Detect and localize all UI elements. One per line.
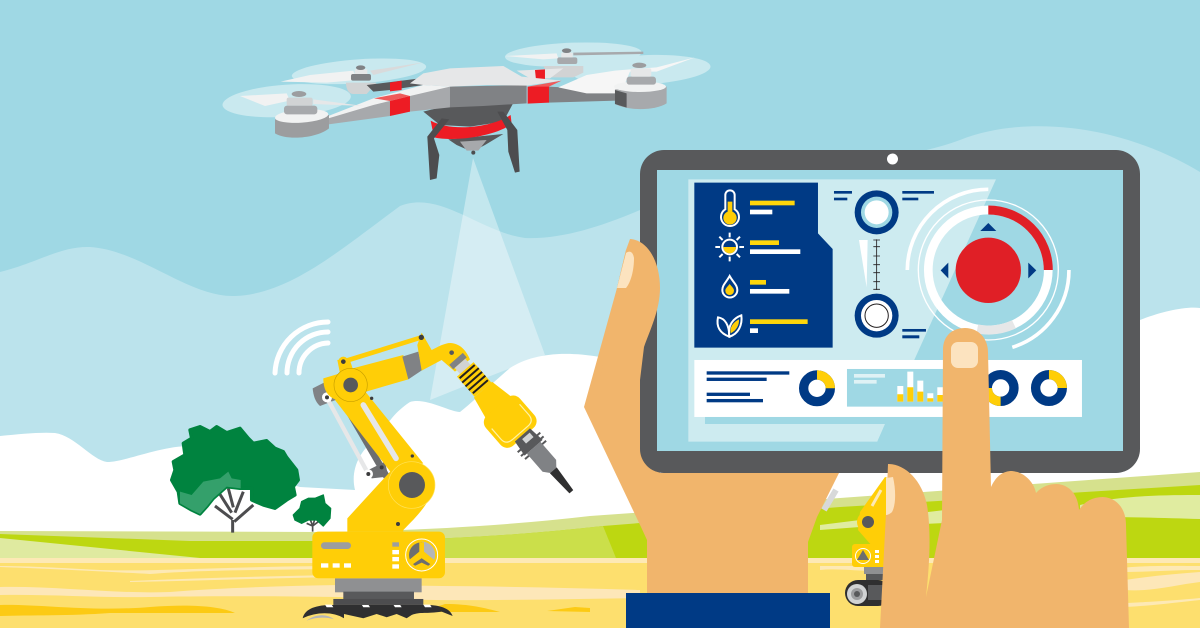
robot tracks — [303, 605, 453, 621]
upper arm stripe — [363, 405, 396, 458]
dial grey arc — [977, 324, 1014, 330]
drone legs — [427, 112, 520, 180]
panel shadow — [705, 415, 940, 424]
counterweight — [313, 383, 340, 406]
control wheel — [406, 539, 438, 571]
tablet frame — [640, 150, 1140, 473]
second small robot behind hand — [824, 477, 891, 606]
icon: sun — [715, 233, 744, 261]
rod joints — [322, 392, 373, 479]
camera housing — [448, 134, 503, 155]
tablet — [640, 150, 1140, 473]
connector — [513, 427, 543, 456]
wrist bands — [449, 353, 467, 369]
body panel grey bar — [321, 542, 351, 549]
drone light beam — [430, 158, 545, 400]
dial red arc — [988, 210, 1048, 270]
tablet camera — [887, 154, 898, 164]
donut chart 3 — [1036, 375, 1062, 401]
center body side — [450, 85, 527, 107]
elbow — [417, 333, 470, 372]
icon: thermometer — [721, 190, 739, 226]
small robot joint — [857, 511, 879, 533]
robot body box — [312, 532, 445, 578]
top rod — [343, 337, 422, 362]
red band right — [528, 81, 562, 104]
gauge labels — [834, 191, 934, 338]
small robot arm stripe — [872, 490, 881, 506]
right hand — [880, 328, 1129, 628]
panel: bottom stats — [694, 360, 1082, 417]
robot forearm — [323, 355, 408, 400]
front left arm — [328, 85, 450, 124]
gauge wedge — [859, 240, 868, 287]
forearm joint — [334, 357, 414, 526]
stats text lines — [707, 371, 789, 402]
robot base columns — [333, 578, 423, 605]
front left motor — [240, 91, 363, 138]
white clouds — [0, 308, 1200, 560]
icon: large tree — [172, 427, 298, 533]
tablet screen — [657, 170, 1123, 451]
right thumb nail — [886, 477, 895, 515]
gauge scale — [873, 239, 880, 290]
tree light shade — [180, 472, 241, 514]
dial white ring — [928, 210, 1048, 330]
body panel grey light — [392, 542, 399, 547]
dial arrows — [941, 223, 1036, 278]
tree crown — [172, 427, 298, 514]
tool head — [480, 392, 540, 452]
reading bars temperature — [750, 201, 795, 214]
reading bars water — [750, 280, 789, 294]
yellow crop ground — [0, 558, 1200, 628]
small robot tracks — [845, 567, 891, 606]
reading bars sun — [750, 240, 800, 254]
shoulder joint — [388, 462, 435, 508]
left hand thumb — [600, 239, 660, 380]
bar chart panel — [847, 369, 947, 407]
small tree trunk — [307, 519, 318, 532]
back right motor — [505, 48, 643, 77]
control dial — [907, 189, 1069, 347]
gauge top — [855, 190, 899, 234]
small robot arm — [858, 477, 888, 546]
lower link bracket — [368, 462, 388, 478]
yellow robot arm — [303, 333, 588, 621]
grey cylinder — [402, 352, 422, 379]
dial outer thin ring — [918, 200, 1058, 340]
icon: wifi signal — [275, 322, 328, 373]
upper arm — [335, 385, 423, 473]
index finger nail — [951, 342, 978, 368]
drone underside dome — [423, 102, 514, 127]
red band left — [374, 93, 410, 116]
shirt cuff — [626, 593, 830, 628]
stats panel background — [694, 360, 1082, 417]
dial outer arcs — [907, 189, 988, 270]
dial red button — [956, 238, 1021, 303]
front right motor — [558, 57, 695, 109]
thumb nail — [617, 252, 634, 288]
drone — [221, 40, 711, 180]
red ring — [431, 115, 512, 139]
white link rod — [327, 397, 368, 474]
icon: leaves — [717, 315, 742, 337]
rotor discs — [221, 40, 711, 121]
right arm — [548, 87, 617, 103]
left hand palm — [584, 250, 839, 593]
gauge bottom — [855, 294, 899, 338]
robot tool — [439, 344, 588, 507]
back left motor — [281, 62, 423, 94]
grey link rod — [345, 405, 387, 477]
small robot base — [852, 544, 888, 567]
accordion — [457, 362, 491, 397]
body panel white lights — [321, 550, 399, 569]
donut chart 2 — [987, 375, 1014, 401]
donut chart 1 — [804, 375, 830, 402]
green fields — [0, 472, 1200, 560]
spike — [550, 467, 575, 494]
screen light panel — [688, 179, 996, 442]
icon: water drop — [722, 276, 737, 297]
tree trunk — [215, 488, 253, 533]
reading bars leaves — [750, 319, 808, 333]
light sky haze layer — [0, 126, 1200, 628]
small robot white rod — [824, 490, 836, 510]
back arms — [367, 68, 563, 92]
small tree crown — [293, 495, 331, 526]
navy panel background — [694, 183, 833, 348]
icon: small tree — [293, 495, 331, 532]
robot lower arm — [347, 470, 434, 532]
top body face — [410, 66, 562, 87]
panel: sensor readings — [694, 183, 833, 348]
tool body — [470, 379, 512, 420]
